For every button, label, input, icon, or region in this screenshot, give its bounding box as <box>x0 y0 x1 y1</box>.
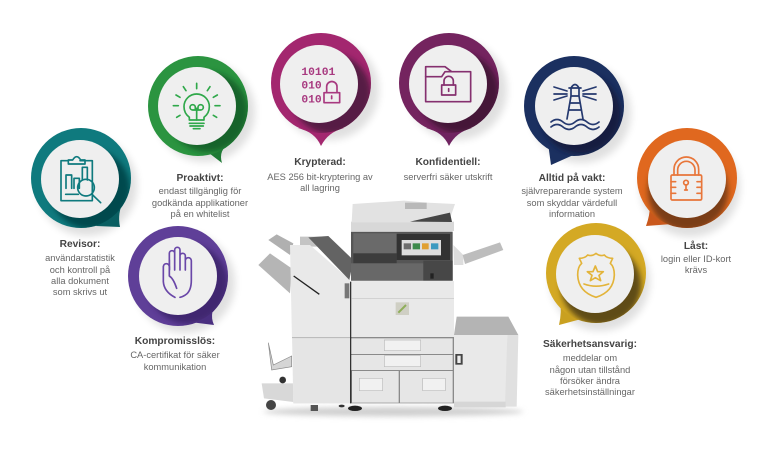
text: Alltid på vakt: som skyddar värdefull <box>527 198 617 208</box>
text: Konfidentiell: serverfri säker utskrift <box>404 172 493 182</box>
pin: Revisor <box>31 128 137 236</box>
pin: Alltid på vakt <box>524 56 631 165</box>
icon: binary lock <box>301 67 340 107</box>
pin: Kompromisslös <box>128 226 235 333</box>
printer <box>258 201 523 416</box>
text: Konfidentiell <box>404 157 493 182</box>
text: Revisor: och kontroll på <box>50 265 111 275</box>
text: Krypterad <box>267 157 373 193</box>
text: Alltid på vakt: Alltid på vakt: <box>539 172 605 184</box>
pin: Krypterad <box>271 33 379 146</box>
icon: padlock <box>671 157 702 200</box>
text: Proaktivt: Proaktivt: <box>176 173 224 184</box>
icon: lighthouse <box>551 84 599 130</box>
text: Konfidentiell: Konfidentiell: <box>415 157 481 168</box>
text: Kompromisslös: Kompromisslös: <box>135 336 215 347</box>
text: Revisor: alla dokument <box>51 276 109 286</box>
text: Låst <box>661 240 732 275</box>
text: Låst: krävs <box>685 265 707 275</box>
text: Låst: login eller ID-kort <box>661 254 732 264</box>
text: Krypterad: Krypterad: <box>294 157 346 168</box>
text: Revisor <box>45 239 115 297</box>
icon: raised hand <box>163 247 191 297</box>
text: Proaktivt <box>152 173 248 219</box>
text: Säkerhetsansvarig: försöker ändra <box>560 376 621 386</box>
text: Säkerhetsansvarig: någon utan tillstånd <box>550 365 630 375</box>
pin: Säkerhetsansvarig <box>546 223 650 331</box>
text: Säkerhetsansvarig: meddelar om <box>563 353 617 363</box>
text: Revisor: som skrivs ut <box>53 287 108 297</box>
pin: Proaktivt <box>148 56 255 163</box>
text: Alltid på vakt <box>521 172 623 219</box>
pin: Låst <box>637 128 740 237</box>
text: Kompromisslös <box>130 336 220 372</box>
icon: binary lock: 10101 <box>301 67 336 79</box>
pin: Konfidentiell <box>399 33 507 146</box>
text: Alltid på vakt: självreparerande system <box>521 186 623 196</box>
icon: light bulb <box>173 83 220 129</box>
text: Säkerhetsansvarig: säkerhetsinställningar <box>545 387 635 397</box>
text: Krypterad: all lagring <box>300 183 340 193</box>
icon: locked folder <box>426 67 471 102</box>
text: Kompromisslös: kommunikation <box>144 362 206 372</box>
text: Låst: Låst: <box>684 240 708 252</box>
icon: badge <box>578 253 614 297</box>
icon: clipboard chart <box>61 157 101 203</box>
text: Revisor: Revisor: <box>60 239 100 250</box>
icon: binary lock: 010 <box>301 81 322 93</box>
text: Kompromisslös: CA-certifikat för säker <box>130 350 220 360</box>
text: Revisor: användarstatistik <box>45 253 115 263</box>
text: Säkerhetsansvarig: Säkerhetsansvarig: <box>543 339 637 350</box>
text: Proaktivt: godkända applikationer <box>152 198 248 208</box>
text: Alltid på vakt: information <box>549 209 595 219</box>
icon: binary lock: 010 <box>301 95 322 107</box>
text: Säkerhetsansvarig <box>543 339 637 397</box>
text: Proaktivt: på en whitelist <box>171 209 230 219</box>
text: Krypterad: AES 256 bit-kryptering av <box>267 172 373 182</box>
text: Proaktivt: endast tillgänglig för <box>159 186 241 196</box>
